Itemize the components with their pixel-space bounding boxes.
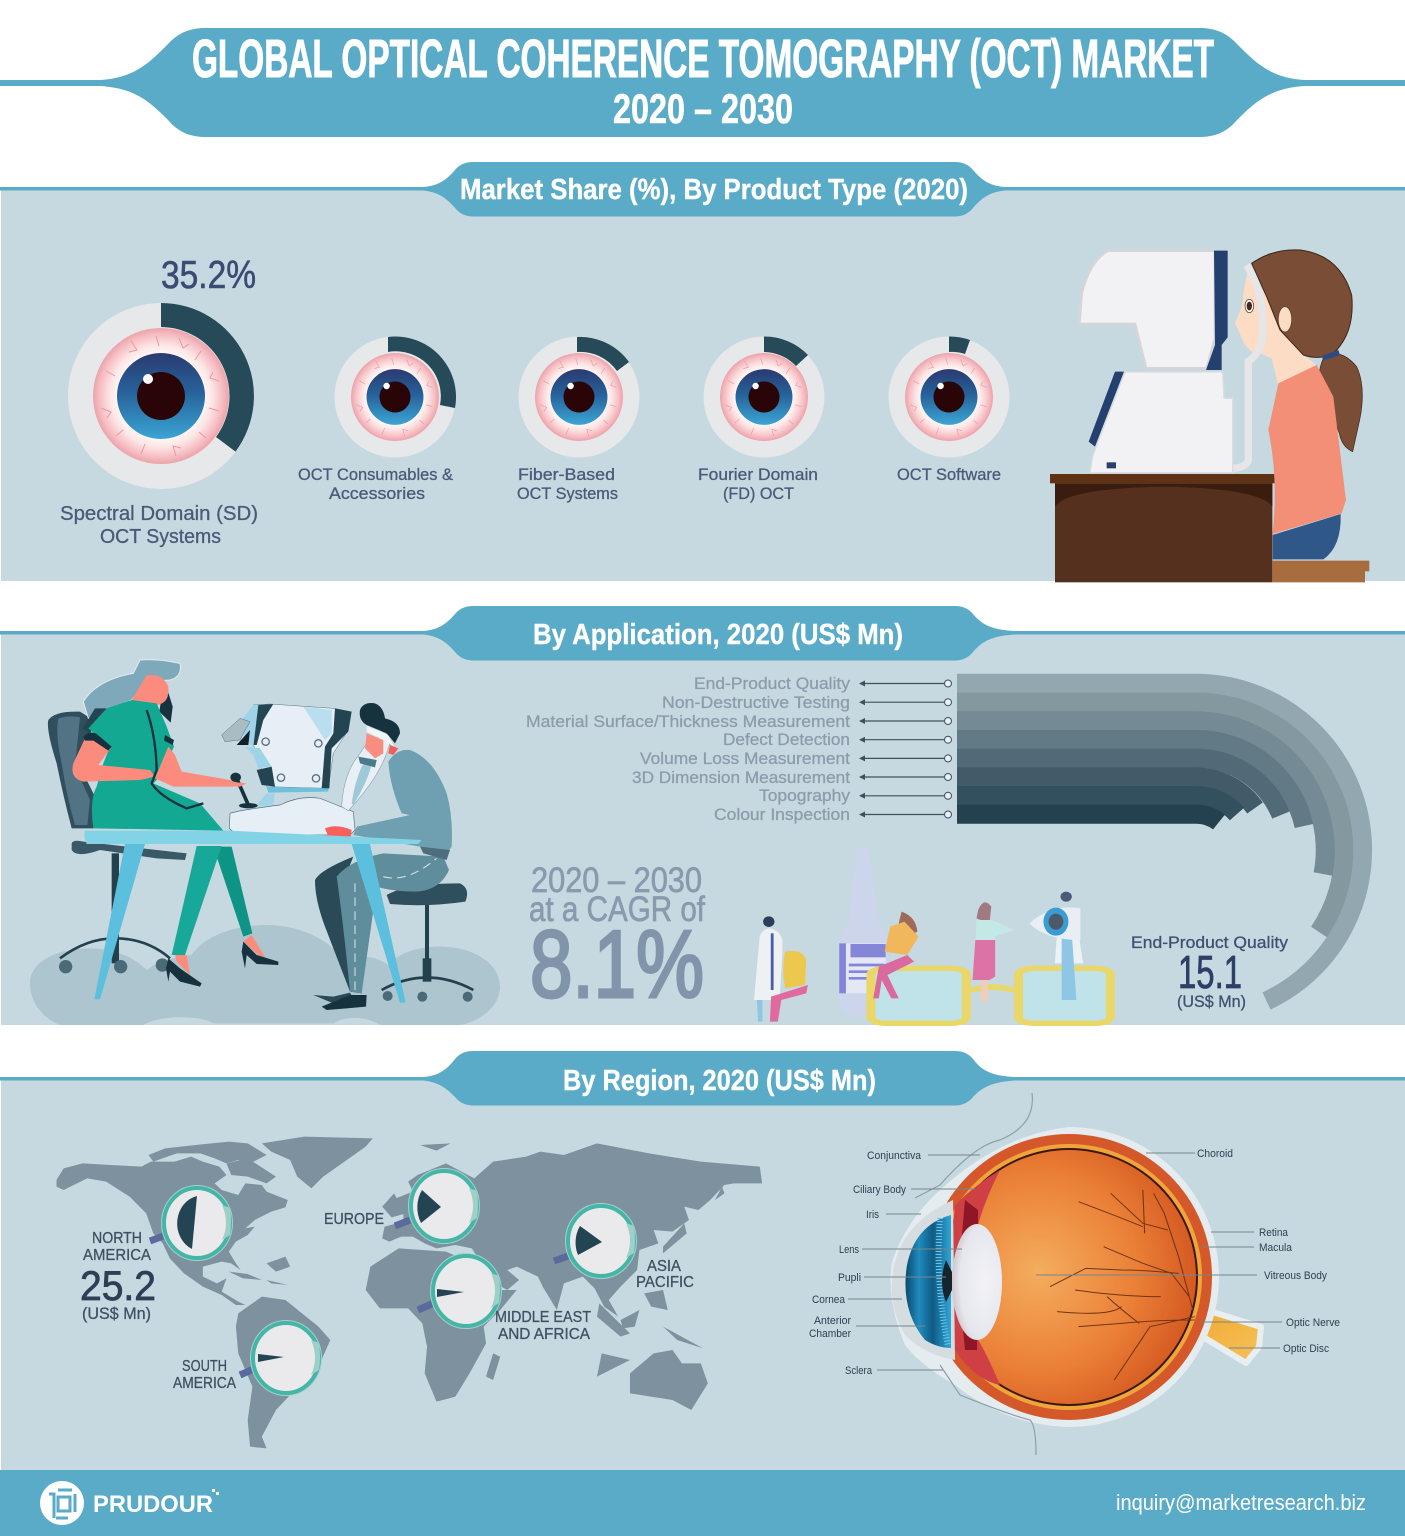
- magnifier: south america: [240, 1321, 321, 1395]
- world map: [57, 1137, 762, 1448]
- value: end-product quality: End-Product Quality: [1131, 933, 1289, 952]
- CAGR callout: 8.1%: [530, 911, 704, 1018]
- section heading: by region: By Region, 2020 (US$ Mn): [563, 1065, 876, 1097]
- hair: [1252, 250, 1352, 357]
- table legs: [94, 844, 406, 1003]
- value: end-product quality: (US$ Mn): [1177, 992, 1246, 1011]
- label: spectral domain: Spectral Domain (SD): [60, 503, 258, 525]
- leader lines: [848, 1153, 1282, 1370]
- patient head and chin rest: [325, 703, 400, 837]
- outer halo and sclera: [891, 1127, 1219, 1427]
- anatomical labels: Macula: [1259, 1242, 1293, 1254]
- section heading: market share: [0, 162, 1405, 216]
- magnifier: middle east and africa: [418, 1254, 501, 1328]
- anatomical eye diagram: [809, 1093, 1340, 1455]
- label: fourier domain: [698, 465, 818, 503]
- glasses: [871, 968, 1110, 1023]
- anatomical labels: Choroid: [1197, 1148, 1233, 1160]
- CAGR callout: [529, 861, 705, 1018]
- anatomical labels: Lens: [839, 1244, 859, 1256]
- region labels: MIDDLE EAST: [495, 1309, 591, 1326]
- torso of patient: [222, 704, 452, 860]
- eye drop bottle: [839, 848, 887, 1017]
- chin rest frame: [1233, 265, 1263, 468]
- label: fourier domain: (FD) OCT: [723, 484, 794, 503]
- doctor holding eye: [1029, 892, 1083, 1000]
- donut eye: software: [888, 336, 1010, 458]
- anatomical labels: Anterior: [814, 1315, 851, 1327]
- region labels: AMERICA: [173, 1375, 236, 1392]
- conjunctiva lines: [915, 1093, 1036, 1455]
- region labels: EUROPE: [324, 1211, 384, 1228]
- application labels and leader lines: Non-Destructive Testing: [662, 693, 850, 712]
- stool: [1272, 561, 1369, 582]
- CAGR callout: 2020 – 2030: [531, 861, 702, 900]
- illustration: people with glasses and eye drops: [754, 848, 1110, 1023]
- label: fiber-based: [517, 465, 618, 503]
- office chair: [48, 712, 187, 973]
- table top: [84, 831, 422, 844]
- anatomical labels: Optic Disc: [1283, 1343, 1329, 1355]
- value: end-product quality: 15.1: [1178, 946, 1242, 998]
- region labels: ASIA: [647, 1258, 681, 1275]
- label: consumables: [298, 465, 454, 503]
- cornea layer: [892, 1200, 955, 1360]
- application labels and leader lines: End-Product Quality: [694, 674, 851, 693]
- standing woman: [973, 902, 1014, 1002]
- panel: market share by product type: [0, 162, 1405, 582]
- eyeball wall: [926, 1134, 1212, 1420]
- region labels: [80, 1211, 694, 1392]
- OCT machine on table: [222, 704, 355, 835]
- floor blobs: [30, 925, 500, 1025]
- face and neck: [1235, 270, 1317, 385]
- illustration: doctor and patient at table: [30, 660, 500, 1025]
- anatomical labels: Retina: [1259, 1227, 1289, 1239]
- lens: [952, 1224, 1002, 1340]
- radial bar chart: applications: [957, 683, 1363, 1001]
- iris and anterior chamber: [905, 1215, 951, 1348]
- jeans: [1273, 514, 1341, 559]
- blood vessels: [1050, 1190, 1195, 1380]
- pupil: [942, 1260, 952, 1302]
- magnifier: asia pacific: [554, 1204, 636, 1278]
- label: fiber-based: Fiber-Based: [518, 465, 615, 484]
- doctor at left: [754, 916, 808, 1022]
- title years: 2020 – 2030: [613, 85, 793, 132]
- machine lower: [1090, 372, 1233, 473]
- anatomical labels: Iris: [866, 1209, 879, 1221]
- panel: region: [0, 1051, 1405, 1470]
- anatomical labels: Pupli: [838, 1272, 861, 1284]
- region labels: SOUTH: [182, 1358, 227, 1375]
- region labels: NORTH: [92, 1230, 142, 1247]
- anatomical labels: Optic Nerve: [1286, 1317, 1340, 1329]
- magnifier: europe: [395, 1169, 479, 1243]
- vitreous body: [942, 1150, 1196, 1404]
- seated woman: [873, 912, 919, 998]
- title banner: [0, 28, 1405, 137]
- anatomical labels: [809, 1148, 1340, 1377]
- application labels and leader lines: 3D Dimension Measurement: [632, 768, 850, 787]
- application labels and leader lines: Volume Loss Measurement: [640, 749, 850, 768]
- optic nerve: [1190, 1305, 1261, 1363]
- application labels and leader lines: Defect Detection: [723, 730, 850, 749]
- donut eye: consumables: [334, 336, 456, 458]
- label: consumables: Accessories: [329, 484, 425, 503]
- ponytail: [1319, 354, 1362, 452]
- section heading: by application: [0, 606, 1405, 660]
- value: 35.2%: 35.2%: [161, 254, 256, 297]
- label: spectral domain: [60, 503, 258, 548]
- seated patient: [770, 951, 808, 1022]
- logo wordmark: PRUDOUR: [93, 1491, 213, 1518]
- label: spectral domain: OCT Systems: [100, 526, 221, 548]
- label: fourier domain: Fourier Domain: [698, 465, 818, 484]
- logo icon: [40, 1481, 84, 1525]
- machine screen: [1089, 372, 1124, 447]
- ciliary body: [948, 1170, 1000, 1385]
- machine upper: [1079, 251, 1215, 368]
- panel: application: [0, 606, 1405, 1025]
- region labels: (US$ Mn): [82, 1304, 151, 1323]
- donut eye: spectral domain 35.2%: [68, 303, 254, 489]
- value: end-product quality: [1131, 933, 1289, 1011]
- contact email: inquiry@marketresearch.biz: [1116, 1490, 1366, 1515]
- application labels and leader lines: [526, 674, 952, 824]
- section heading: market share: Market Share (%), By Product Type (2020): [460, 174, 968, 206]
- donut eye: fourier domain: [704, 336, 824, 458]
- doctor hand on joystick: [220, 781, 247, 787]
- application labels and leader lines: Topography: [759, 786, 851, 805]
- label: fiber-based: OCT Systems: [517, 484, 618, 503]
- magnifier: north america: [150, 1186, 232, 1260]
- doctor woman: [72, 660, 278, 987]
- region labels: AMERICA: [83, 1247, 151, 1264]
- sweater: [1268, 365, 1346, 534]
- anatomical labels: Ciliary Body: [853, 1184, 906, 1196]
- section heading: by region: [0, 1051, 1405, 1106]
- region labels: PACIFIC: [636, 1274, 694, 1291]
- machine blue strip: [1206, 251, 1228, 370]
- region labels: 25.2: [80, 1262, 156, 1309]
- region labels: AND AFRICA: [498, 1326, 590, 1343]
- application labels and leader lines: Colour Inspection: [714, 805, 850, 824]
- illustration: patient at OCT machine: [1050, 250, 1369, 582]
- anatomical labels: Conjunctiva: [867, 1150, 922, 1162]
- label: consumables: OCT Consumables &: [298, 465, 454, 484]
- patient stool: [382, 883, 473, 1002]
- anatomical labels: Cornea: [812, 1294, 846, 1306]
- patient man: [313, 853, 449, 1010]
- CAGR callout: at a CAGR of: [529, 890, 705, 929]
- label: software: OCT Software: [897, 465, 1001, 484]
- application labels and leader lines: Material Surface/Thickness Measurement: [526, 712, 850, 731]
- section heading: by application: By Application, 2020 (US$ Mn): [533, 619, 903, 651]
- desk: [1050, 474, 1277, 582]
- donut eye: fiber-based: [518, 336, 640, 458]
- anatomical labels: Sclera: [845, 1365, 873, 1377]
- footer bar: [0, 1470, 1405, 1536]
- anatomical labels: Vitreous Body: [1264, 1270, 1327, 1282]
- anatomical labels: Chamber: [809, 1328, 851, 1340]
